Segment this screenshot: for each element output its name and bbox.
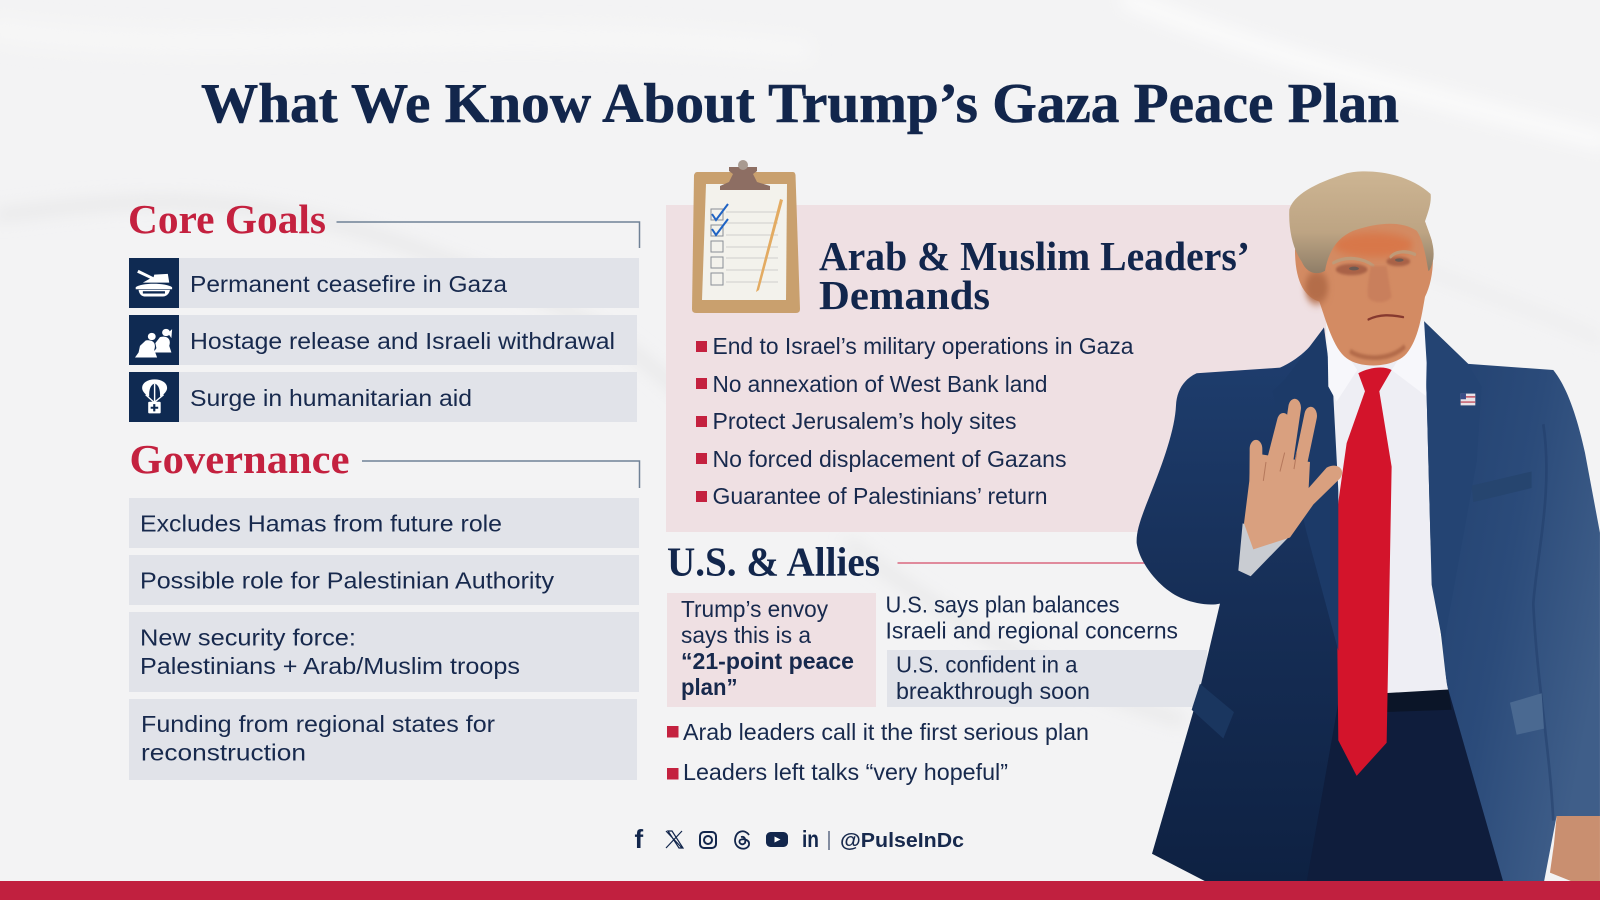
item: new security force: New security force: [140,624,356,650]
item: palestinian authority: Possible role for Palestinian Authority [140,568,555,594]
heading: U.S. and allies: U.S. & Allies [667,538,880,584]
heading: core goals: Core Goals [128,196,326,242]
nose [1368,266,1392,302]
item: hostage release: Hostage release and Israeli withdrawal [190,328,615,354]
list: demands: Guarantee of Palestinians’ return [712,483,1048,509]
icon: facebook: f [634,824,644,854]
mouth [1368,315,1403,320]
item: humanitarian aid [129,372,637,422]
panel: core goals [128,196,640,422]
governance connector line [362,461,640,488]
head and neck [1289,171,1434,365]
callout: 21-point peace plan: “21-point peace [681,648,854,674]
callout: 21-point peace plan: Trump’s envoy [681,596,828,622]
panel: U.S. and allies [667,538,1207,785]
heading: demands: Demands [819,272,990,318]
item: palestinian authority [129,555,639,605]
panel: arab and muslim leaders' demands [666,205,1326,532]
demands background [666,205,1326,532]
hair [1289,171,1434,273]
item: excludes hamas [129,498,639,548]
trousers [1307,689,1503,882]
right lapel [1423,320,1482,646]
icon: instagram [700,832,716,848]
eye sockets [1336,257,1410,275]
heading: demands [819,233,1250,318]
item: new security force [129,612,639,692]
left-cheek shadow [1305,271,1328,304]
callout: confident in breakthrough: breakthrough soon [896,678,1090,704]
item: permanent ceasefire: Permanent ceasefire in Gaza [190,271,507,297]
icon: threads [735,831,749,849]
sleeve seam shadow [1533,424,1553,821]
shirt cuff [1238,523,1288,576]
callout: confident in breakthrough [887,650,1207,707]
list: demands: End to Israel’s military operations in Gaza [712,333,1134,359]
icon: X [666,831,683,848]
bottom red bar [0,881,1600,900]
social media footer [634,824,964,854]
forehead flush [1333,233,1413,257]
waving hand [1244,408,1342,549]
right-side jacket and sleeve [1423,320,1600,882]
footer divider and handle: @PulseInDc [840,829,964,852]
list: demands: No forced displacement of Gazans [712,446,1066,472]
item: humanitarian aid: Surge in humanitarian aid [190,385,472,411]
callout: 21-point peace plan [667,593,876,707]
item: funding: Funding from regional states for [141,711,495,737]
list: arab leaders reaction: Leaders left talks “very hopeful” [683,759,1008,785]
shirt [1327,320,1448,693]
jacket pocket flaps [1192,684,1544,739]
illustration: Trump waving [1137,171,1600,882]
item: funding [129,699,637,780]
list: demands [696,333,1134,509]
core goals connector line [336,222,640,248]
text: plan balances concerns: Israeli and regional concerns [886,618,1178,644]
lapel flag pin [1461,394,1475,405]
U.S. and allies rule [898,562,1150,564]
item: new security force: Palestinians + Arab/Muslim troops [140,653,520,679]
icon: youtube [766,832,788,847]
left-side jacket and arm [1137,328,1360,882]
heading: demands: Arab & Muslim Leaders’ [819,233,1250,279]
belt [1383,689,1452,712]
list: demands: Protect Jerusalem’s holy sites [712,408,1016,434]
callout: 21-point peace plan: says this is a [681,622,811,648]
panel: governance [129,436,640,780]
icon: clipboard with checklist and pencil [692,160,800,313]
jaw line shadow [1350,346,1405,358]
list: arab leaders reaction: Arab leaders call it the first serious plan [683,719,1089,745]
list: demands: No annexation of West Bank land [712,371,1048,397]
item: hostage release [129,315,637,365]
right hand [1550,816,1600,882]
icon: linkedin: in [802,826,819,852]
breast pocket [1472,471,1532,502]
text: plan balances concerns [886,592,1178,644]
list: arab leaders reaction [667,719,1089,785]
left lapel [1273,328,1338,651]
text: plan balances concerns: U.S. says plan balances [886,592,1120,618]
brows [1333,252,1415,266]
title: What We Know About Trump’s Gaza Peace Plan [201,73,1399,135]
item: excludes hamas: Excludes Hamas from future role [140,510,502,536]
heading: governance: Governance [130,436,350,482]
necktie [1336,367,1392,776]
item: funding: reconstruction [141,740,306,766]
callout: confident in breakthrough: U.S. confident in a [896,652,1078,678]
eyes [1349,258,1404,270]
shirt collar [1327,320,1427,402]
item: permanent ceasefire [129,258,639,308]
callout: 21-point peace plan: plan” [681,674,738,700]
